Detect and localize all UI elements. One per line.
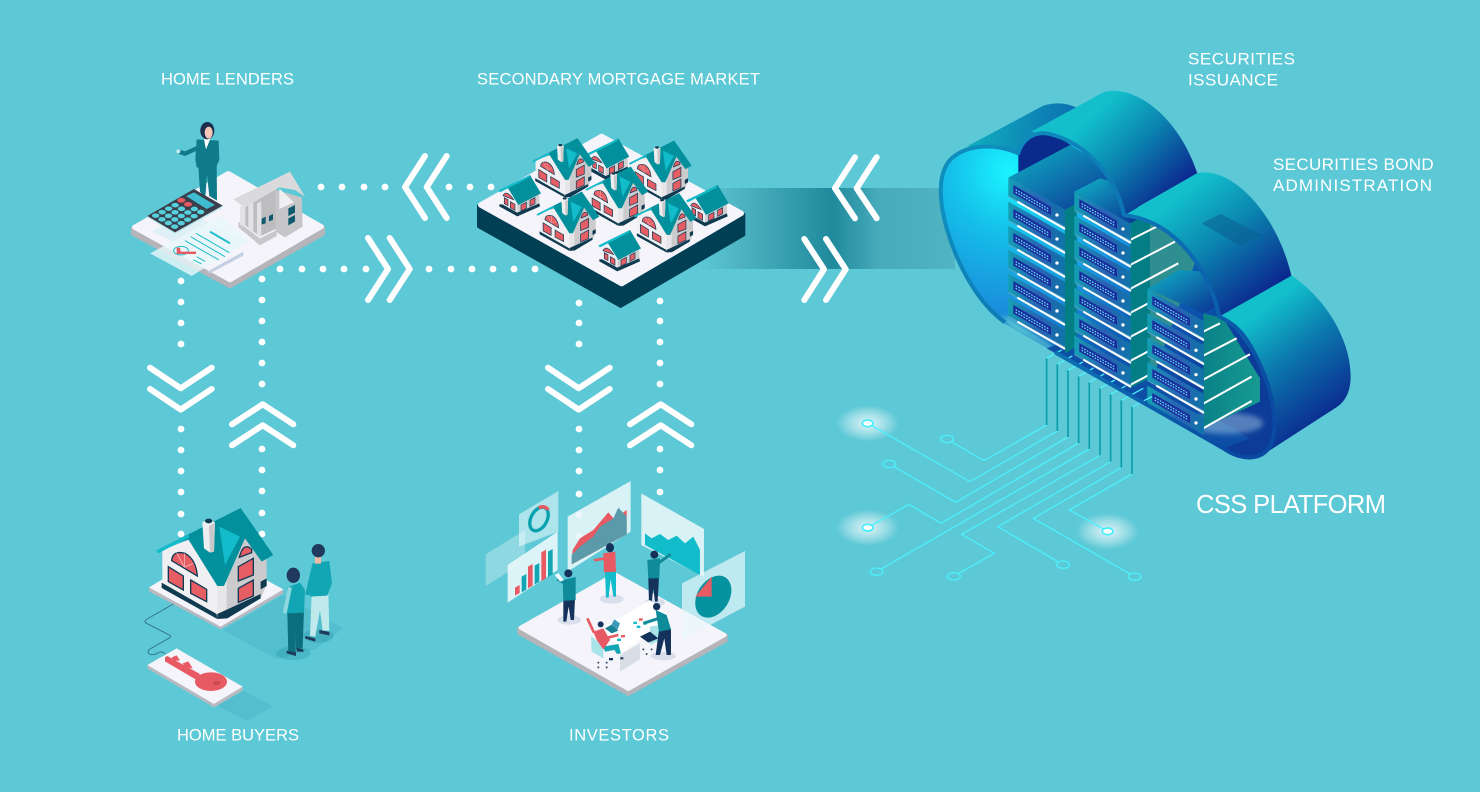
large house, front left (537, 191, 599, 251)
platform (519, 574, 726, 694)
heading: issuance line: ISSUANCE (1188, 71, 1278, 90)
key plate (147, 648, 273, 721)
arrow: investors to market (630, 404, 691, 445)
trace end rings (870, 435, 1141, 580)
cloud front rim (941, 133, 1274, 457)
arrow: cloud to market (835, 157, 877, 218)
small house, front (598, 230, 641, 271)
cloud lobe: middle (1125, 172, 1292, 317)
floating panel: pie chart (682, 551, 745, 640)
floating panel: blank (486, 530, 525, 586)
wire from house to key (145, 604, 173, 655)
house plate (149, 550, 283, 629)
house (156, 508, 273, 619)
arrow: lenders to market (368, 238, 410, 300)
floating panel: donut chart (519, 491, 558, 547)
arrow: buyers to lenders (232, 404, 293, 445)
glow node left bottom (836, 509, 899, 546)
sticky notes (617, 618, 647, 641)
arch shadow (1018, 133, 1072, 173)
heading: css platform: CSS PLATFORM (1196, 491, 1386, 519)
dotted connector: lenders to market, upper line (321, 184, 491, 190)
heading: administration: ADMINISTRATION (1273, 176, 1432, 195)
heading: home lenders: HOME LENDERS (161, 70, 294, 88)
connector tips under servers (1047, 350, 1152, 407)
large house, center (586, 166, 648, 226)
large house, back right (629, 140, 692, 200)
glow node right (1076, 513, 1139, 550)
server stack 2 (1074, 178, 1178, 388)
circuit board traces (836, 358, 1141, 580)
glowing node dots (862, 420, 1113, 535)
data band between market and cloud (700, 188, 955, 269)
interior behind stack 2 (1130, 218, 1197, 385)
dotted connector: lenders to market, lower line (280, 266, 535, 272)
traces (868, 423, 1132, 574)
large house, front right (634, 193, 697, 253)
man pointing at chart (645, 551, 671, 607)
server stack 3 (1147, 270, 1263, 437)
arrow: market to investors (548, 368, 610, 410)
small house, back (587, 138, 629, 180)
buyers shadow (223, 595, 343, 659)
lower-left edge fade (1000, 317, 1058, 355)
heading: investors: INVESTORS (569, 726, 669, 744)
woman buyer (276, 568, 311, 660)
illustration: secondary mortgage market (478, 136, 744, 307)
dotted connector: lenders and buyers (181, 279, 262, 534)
cloud with server stacks (941, 91, 1351, 457)
arrow: market to cloud (804, 239, 846, 300)
small house, right (686, 185, 729, 226)
large house, back left (532, 138, 595, 198)
server stack 1 (1008, 145, 1123, 353)
side vent mark (1202, 214, 1262, 246)
dotted connector: market and investors (579, 301, 660, 536)
floating panel: bar chart (508, 532, 558, 603)
laptop (605, 619, 620, 633)
cloud lobe: far left (967, 103, 1078, 154)
man buyer (303, 544, 334, 643)
arrow: market to lenders (405, 156, 447, 218)
heading: securities issuance: SECURITIES (1188, 50, 1295, 68)
arrow: lenders to buyers (150, 368, 212, 410)
woman presenting (594, 543, 624, 604)
person with tablet (555, 569, 581, 625)
illustration: home lenders (133, 122, 323, 287)
cloud inner face (941, 133, 1274, 457)
key (165, 655, 227, 691)
seated person (587, 618, 623, 667)
table (605, 600, 670, 672)
small house, left (498, 175, 541, 216)
standing person with chair (640, 603, 671, 655)
glow node left top (836, 405, 899, 442)
woman presenter (176, 122, 219, 201)
meeting table group (587, 600, 676, 672)
heading: secondary mortgage market: SECONDARY MORTGAGE MARKET (477, 70, 760, 88)
vertical connectors (1047, 358, 1132, 474)
floor strip (1047, 338, 1250, 448)
cloud lobe: top (1030, 91, 1197, 215)
grey bank house (233, 172, 305, 245)
heading: home buyers: HOME BUYERS (177, 726, 299, 744)
illustration: home buyers (145, 508, 343, 721)
illustration: investors (486, 481, 745, 694)
cloud lobe: right (1219, 276, 1351, 457)
calculator (147, 189, 223, 234)
floating panel: teal area chart (641, 493, 704, 577)
documents (150, 212, 248, 276)
heading: securities bond: SECURITIES BOND (1273, 155, 1434, 174)
floating panel: area chart (568, 481, 631, 572)
